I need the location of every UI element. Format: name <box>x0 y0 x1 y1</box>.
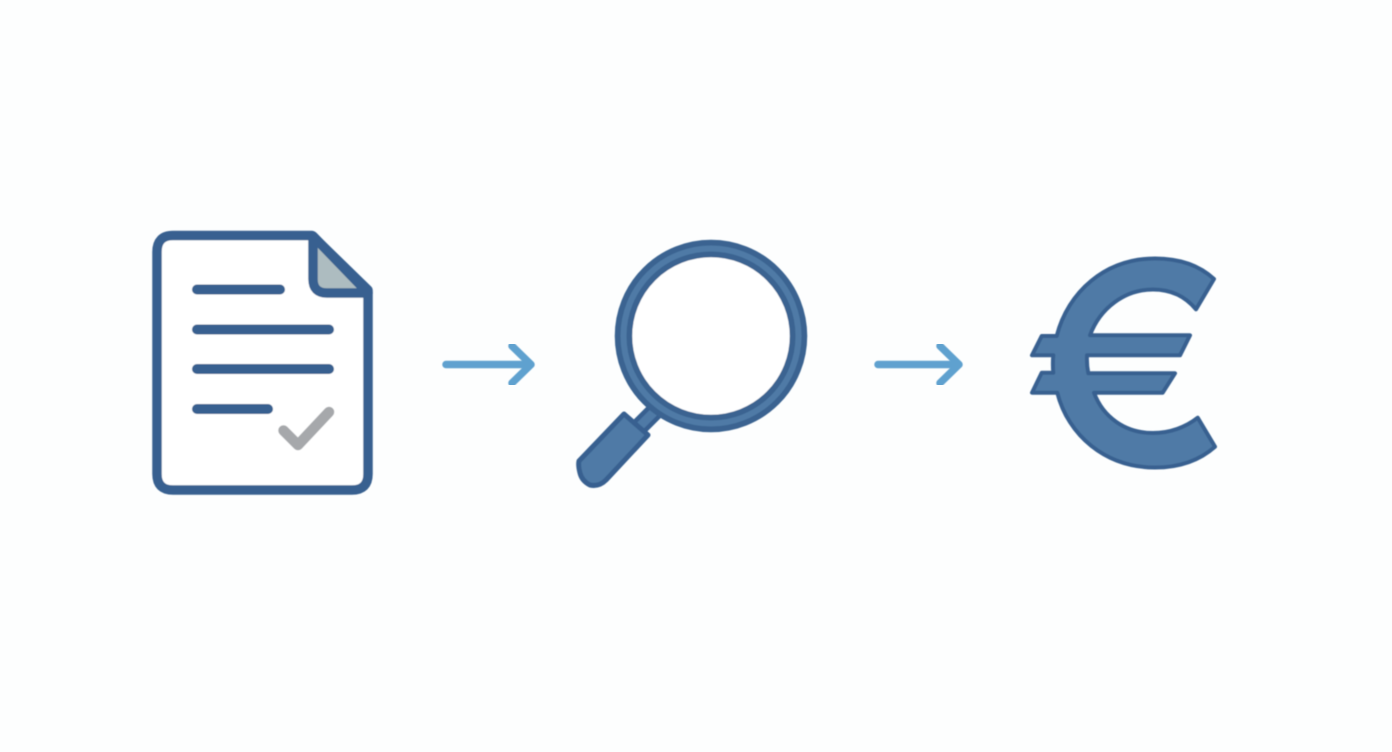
icon: magnifying glass <box>579 248 798 485</box>
checkmark <box>284 412 329 445</box>
icon: document with checkmark <box>157 236 368 490</box>
arrow: magnifier to euro <box>878 346 959 383</box>
icon: euro sign <box>1032 258 1215 468</box>
folded corner <box>313 236 368 293</box>
arrow: document to magnifier <box>446 346 531 383</box>
handle grip <box>579 414 648 485</box>
lens ring <box>624 248 798 424</box>
handle connector <box>638 406 660 428</box>
text lines <box>197 290 329 409</box>
document page outline <box>157 236 368 490</box>
